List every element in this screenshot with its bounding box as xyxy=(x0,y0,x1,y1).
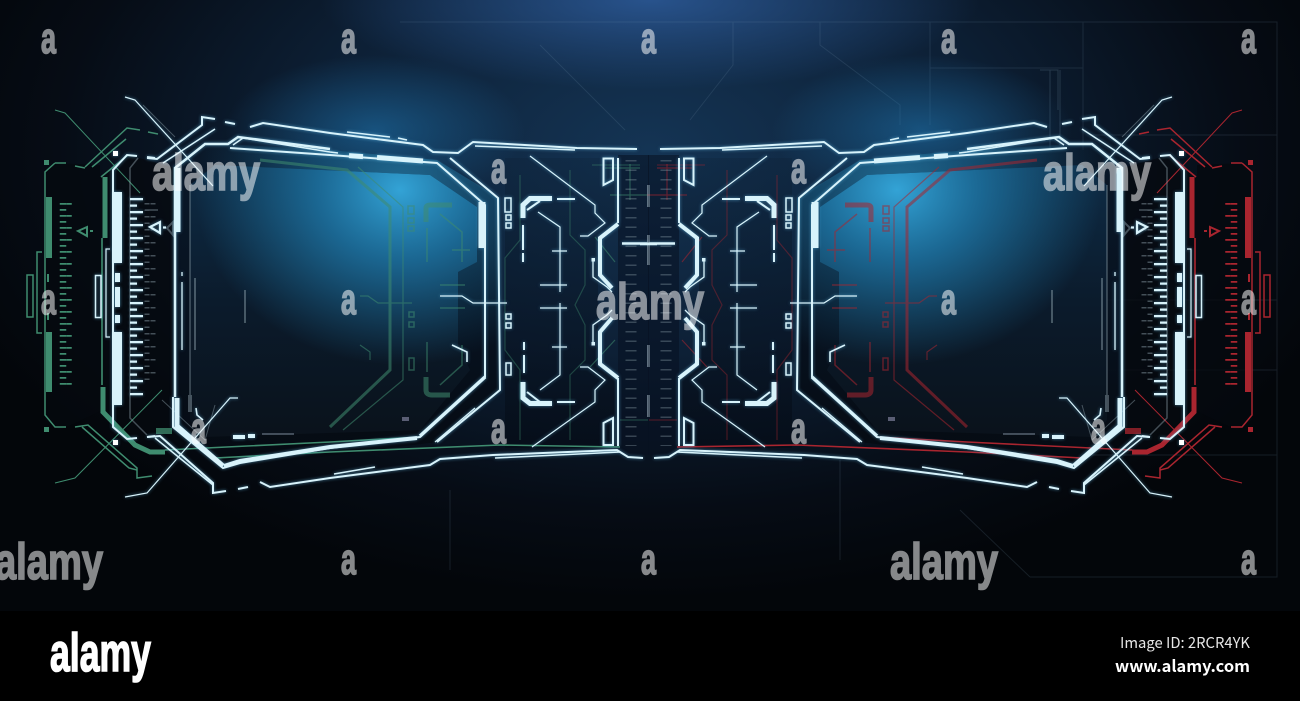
site url: www.alamy.com xyxy=(1115,653,1250,677)
watermark letters: a xyxy=(341,535,356,584)
watermark letters: a xyxy=(1091,404,1106,453)
watermark letters: a xyxy=(491,144,506,193)
watermark words xyxy=(0,144,1151,590)
watermark letters: a xyxy=(641,535,656,584)
watermark letters: a xyxy=(191,404,206,453)
watermark words: alamy xyxy=(152,144,260,201)
watermark letters: a xyxy=(641,14,656,63)
watermark words: alamy xyxy=(596,273,704,330)
alamy logo: alamy xyxy=(50,623,151,683)
watermark letters: a xyxy=(41,275,56,324)
watermark letters: a xyxy=(791,404,806,453)
footer bar xyxy=(0,611,1300,701)
watermark letters: a xyxy=(941,14,956,63)
circuit background lines xyxy=(400,22,1277,577)
watermark letters: a xyxy=(341,275,356,324)
watermark letters: a xyxy=(941,275,956,324)
centre divider tick xyxy=(640,243,657,245)
watermark letters xyxy=(41,14,1256,584)
watermark letters: a xyxy=(1241,535,1256,584)
image id: Image ID: 2RCR4YK xyxy=(1120,632,1250,653)
watermark letters: a xyxy=(341,14,356,63)
watermark letters: a xyxy=(1241,275,1256,324)
right HUD screen (red) xyxy=(647,55,1270,497)
left HUD screen (green) xyxy=(27,55,650,497)
watermark letters: a xyxy=(491,404,506,453)
watermark letters: a xyxy=(791,144,806,193)
watermark letters: a xyxy=(41,14,56,63)
watermark letters: a xyxy=(1241,14,1256,63)
watermark words: alamy xyxy=(1043,144,1151,201)
watermark words: alamy xyxy=(890,533,998,590)
